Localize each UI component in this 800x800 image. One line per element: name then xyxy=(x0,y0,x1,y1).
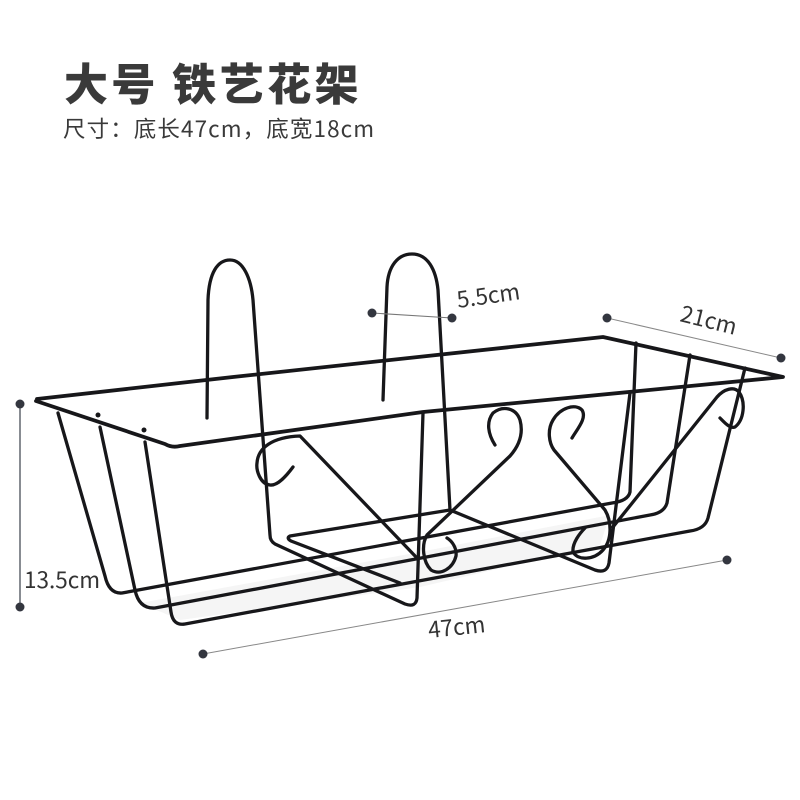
dimension: length 47cm xyxy=(198,556,732,658)
title: 大号 铁艺花架 xyxy=(64,49,362,113)
dimension: hook width 5.5cm: 5.5cm xyxy=(455,274,522,315)
scroll bracket 2 xyxy=(424,409,521,572)
wire tips on rim xyxy=(96,412,146,432)
scroll bracket 1 xyxy=(257,436,417,558)
dimension: height 13.5cm xyxy=(16,400,100,612)
tray shadow xyxy=(140,515,610,620)
tray rails xyxy=(288,510,450,583)
dimension: width 21cm xyxy=(602,297,786,362)
dimension: height 13.5cm: 13.5cm xyxy=(24,563,100,595)
back wire 2 xyxy=(100,355,690,608)
dimension: width 21cm: 21cm xyxy=(677,297,741,342)
back wire 1 xyxy=(58,343,636,593)
right hanging hook and leg xyxy=(383,254,630,571)
scroll bracket 3 xyxy=(549,407,610,558)
subtitle: base size: 尺寸：底长47cm，底宽18cm xyxy=(63,112,375,144)
metal planter rack xyxy=(36,254,783,624)
dimension: hook width 5.5cm xyxy=(368,274,522,322)
dimension: length 47cm: 47cm xyxy=(426,607,487,645)
top rim xyxy=(36,337,783,447)
scroll bracket 4 xyxy=(613,389,743,527)
left hanging hook and leg xyxy=(207,260,423,605)
back wire 3 xyxy=(145,368,745,624)
